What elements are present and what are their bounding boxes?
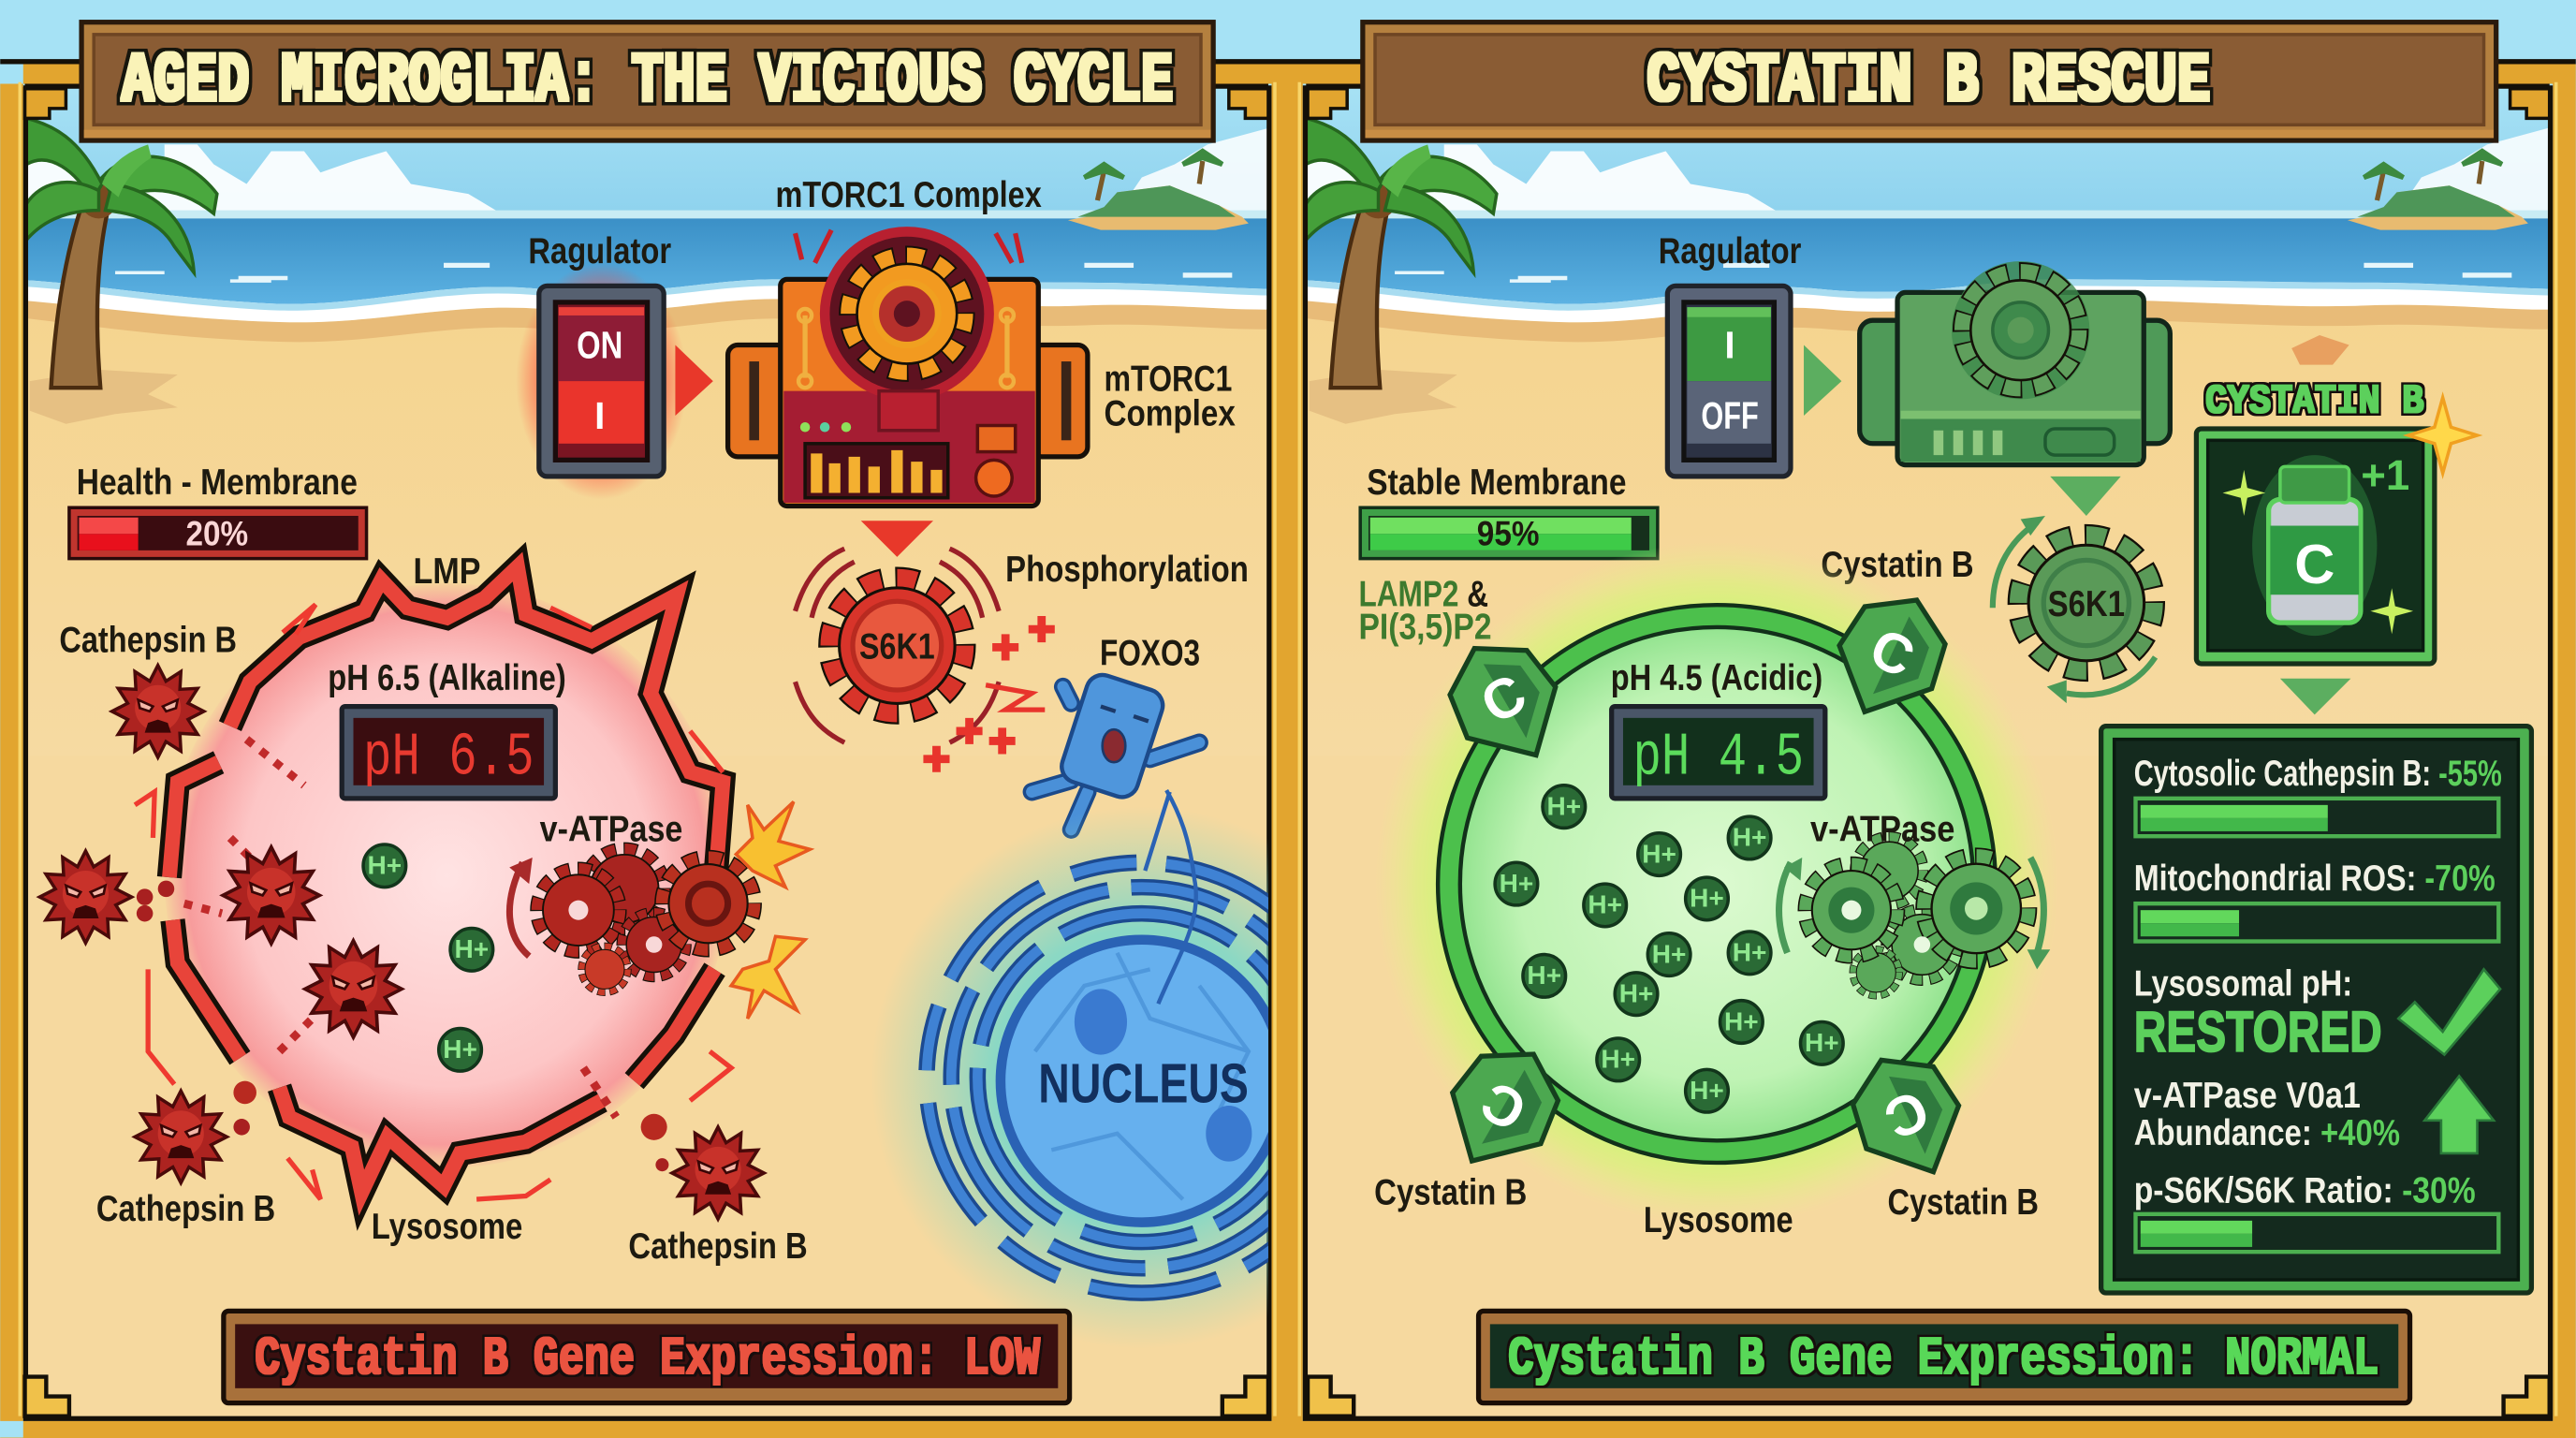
stat: lysosomal pH restored xyxy=(2134,963,2500,1064)
nucleus with endoplasmic reticulum xyxy=(882,789,1268,1339)
stat: v-ATPase abundance: Abundance: +40% xyxy=(2134,1113,2400,1153)
cathepsin labels left xyxy=(59,621,808,1267)
label: mTORC1 Complex side: mTORC1 xyxy=(1104,360,1232,400)
label: v-ATPase left: v-ATPase xyxy=(540,809,682,849)
background: beach scene, right panel xyxy=(1280,82,2569,1438)
health bar 95% xyxy=(1360,507,1658,559)
gear: S6K1 resting: S6K1 xyxy=(2048,584,2125,624)
label: v-ATPase right: v-ATPase xyxy=(1810,809,1954,849)
label: LAMP2 and PI(3,5)P2: PI(3,5)P2 xyxy=(1358,608,1492,648)
gear: S6K1 phosphorylated xyxy=(796,549,999,742)
banner: low expression xyxy=(224,1311,1070,1403)
shields: Cystatin B: C xyxy=(1875,1078,1939,1152)
protons: many H+: H+ xyxy=(1733,938,1766,967)
banner: normal expression xyxy=(1479,1311,2410,1403)
protons: few H+ xyxy=(363,844,493,1071)
lysosome: damaged xyxy=(135,566,731,1199)
gears: working v-ATPase xyxy=(1779,838,2050,995)
label: mTORC1 Complex top: mTORC1 Complex xyxy=(775,175,1042,215)
protons: many H+: H+ xyxy=(1652,939,1686,968)
switch: ragulator ON: I xyxy=(594,394,605,437)
title plaque: left xyxy=(79,20,1216,143)
display: pH 4.5 xyxy=(1612,707,1825,799)
heading: cystatin b rescue: CYSTATIN B RESCUE xyxy=(1647,41,2210,122)
switch: ragulator ON: ON xyxy=(577,324,622,367)
left label: Ragulator: Ragulator xyxy=(528,231,671,271)
switch: ragulator OFF: I xyxy=(1724,324,1735,367)
protons: many H+: H+ xyxy=(1724,1006,1759,1035)
panel: results xyxy=(2101,726,2531,1293)
machine: inactive mTORC1 xyxy=(1860,261,2170,465)
card: cystatin B vial xyxy=(2196,398,2477,664)
stat: mitochondrial ROS: Mitochondrial ROS: -70% xyxy=(2134,858,2496,899)
arrow: mTORC1 to S6K1 green xyxy=(2050,477,2121,516)
protons: many H+: H+ xyxy=(1690,884,1724,913)
label: LAMP2 and PI(3,5)P2 xyxy=(1358,575,1492,648)
shields: Cystatin B: C xyxy=(1861,616,1924,690)
label: Lysosome left: Lysosome xyxy=(372,1207,522,1247)
arrow: switch to mTORC1 xyxy=(675,345,713,416)
label: LAMP2 and PI(3,5)P2: LAMP2 & xyxy=(1358,575,1488,615)
protons: few H+: H+ xyxy=(443,1034,477,1064)
label: Cystatin B pixel heading: CYSTATIN B xyxy=(2205,378,2423,425)
display: pH 6.5 xyxy=(342,707,555,799)
protons: many H+: H+ xyxy=(1601,1045,1635,1074)
arrow: mTORC1 to S6K1 xyxy=(861,521,933,557)
stat: v-ATPase abundance: v-ATPase V0a1 xyxy=(2134,1076,2361,1116)
label: LMP: LMP xyxy=(414,551,481,592)
explosions xyxy=(731,801,810,1019)
stat: cytosolic cathepsin: Cytosolic Cathepsin B: -55% xyxy=(2134,754,2502,794)
stat: v-ATPase abundance xyxy=(2134,1076,2494,1153)
label: Health - Membrane: Health - Membrane xyxy=(77,462,358,503)
label: NUCLEUS: NUCLEUS xyxy=(1038,1051,1249,1114)
character: FOXO3 xyxy=(1032,670,1199,829)
protons: few H+: H+ xyxy=(368,851,402,880)
title plaque: right xyxy=(1360,20,2498,143)
stat: lysosomal pH restored: Lysosomal pH: xyxy=(2134,963,2352,1004)
health bar 95%: 95% xyxy=(1477,515,1539,553)
label: Stable Membrane: Stable Membrane xyxy=(1367,462,1626,503)
display: pH 4.5: pH 4.5 xyxy=(1633,725,1804,793)
icon: bottle xyxy=(2269,466,2361,623)
stat: lysosomal pH restored: RESTORED xyxy=(2134,1000,2382,1064)
switch: ragulator OFF: OFF xyxy=(1701,394,1759,437)
shields: Cystatin B: C xyxy=(1471,1069,1537,1144)
phospho plus signs and zigzag xyxy=(923,616,1055,772)
lower right panel labels: Cystatin B xyxy=(1374,1172,1527,1212)
cathepsin labels left: Cathepsin B xyxy=(59,621,237,661)
lower right panel labels: Cystatin B xyxy=(1888,1182,2039,1223)
stat: mitochondrial ROS xyxy=(2134,858,2498,942)
health bar 20% xyxy=(69,507,367,559)
icon: bottle: C xyxy=(2294,533,2334,595)
protons: few H+: H+ xyxy=(455,934,489,963)
protons: many H+: H+ xyxy=(1690,1076,1724,1105)
protons: many H+: H+ xyxy=(1642,839,1676,868)
lysosome: healthy xyxy=(1375,542,2058,1225)
machine: active mTORC1 xyxy=(728,230,1088,506)
protons: many H+: H+ xyxy=(1527,961,1561,990)
gear: S6K1 resting xyxy=(1993,516,2156,703)
protons: many H+: H+ xyxy=(1733,823,1766,852)
label: pH 6.5 Alkaline: pH 6.5 (Alkaline) xyxy=(328,658,566,698)
label: mTORC1 Complex side xyxy=(1104,360,1236,434)
label: pH 4.5 Acidic: pH 4.5 (Acidic) xyxy=(1611,658,1822,698)
monsters: Cathepsin B xyxy=(39,666,764,1219)
stat: cytosolic cathepsin xyxy=(2134,754,2502,836)
shields: Cystatin B: C xyxy=(1471,661,1537,736)
right label: Ragulator: Ragulator xyxy=(1659,231,1801,271)
protons: many H+ xyxy=(1495,785,1843,1112)
gear: S6K1 phosphorylated: S6K1 xyxy=(859,627,935,668)
display: pH 6.5: pH 6.5 xyxy=(363,725,534,793)
label: Phosphorylation: Phosphorylation xyxy=(1005,550,1249,590)
arrow: switch to mTORC1 green xyxy=(1804,345,1841,416)
shields: Cystatin B xyxy=(1427,579,1980,1194)
gears: broken v-ATPase xyxy=(509,849,754,992)
card: cystatin B vial: +1 xyxy=(2361,451,2409,499)
protons: many H+: H+ xyxy=(1546,791,1581,820)
banner: low expression: Cystatin B Gene Expression: LOW xyxy=(255,1329,1040,1390)
cathepsin labels left: Cathepsin B xyxy=(96,1189,275,1229)
protons: many H+: H+ xyxy=(1619,978,1653,1007)
protons: many H+: H+ xyxy=(1805,1028,1839,1057)
switch: ragulator OFF xyxy=(1667,286,1791,477)
heading: aged microglia: AGED MICROGLIA: THE VICIOUS CYCLE xyxy=(122,41,1173,122)
protons: many H+: H+ xyxy=(1588,890,1622,919)
switch: ragulator ON xyxy=(516,263,687,499)
background: beach scene, left panel xyxy=(0,82,1290,1438)
arrow: card to results xyxy=(2280,679,2350,714)
health bar 20%: 20% xyxy=(186,515,248,553)
sky strip above frames xyxy=(0,0,2576,61)
label: mTORC1 Complex side: Complex xyxy=(1104,394,1236,434)
protons: many H+: H+ xyxy=(1500,869,1533,898)
stat: p-S6K ratio xyxy=(2134,1171,2498,1252)
label: Cystatin B upper: Cystatin B xyxy=(1821,545,1974,585)
label: Lysosome right: Lysosome xyxy=(1644,1200,1793,1240)
lower right panel labels xyxy=(1374,1172,2039,1223)
label: FOXO3: FOXO3 xyxy=(1100,634,1200,674)
stat: p-S6K ratio: p-S6K/S6K Ratio: -30% xyxy=(2134,1171,2476,1211)
cathepsin labels left: Cathepsin B xyxy=(628,1226,808,1267)
